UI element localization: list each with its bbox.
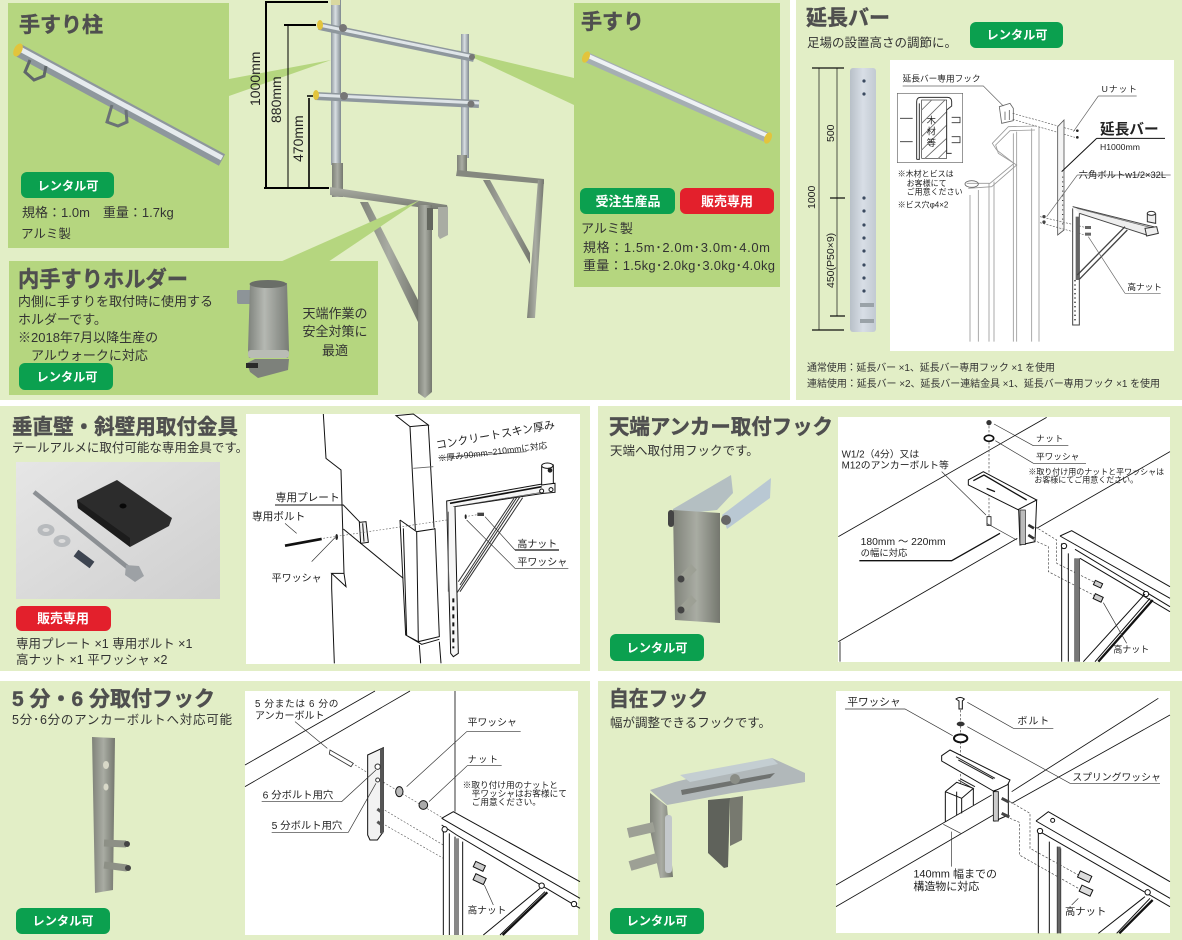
diagram labels: コンクリートスキン厚み (435, 418, 556, 452)
description text (18, 294, 213, 363)
posts (331, 0, 341, 165)
description text: 天端へ取付用フックです。 (610, 444, 759, 458)
diagram labels: 高ナット (1113, 643, 1149, 654)
leader lines (903, 86, 1171, 293)
dimension lines (812, 68, 845, 330)
parts list: 専用プレート ×1 専用ボルト ×1 (16, 637, 192, 651)
scaffold handrail photo (247, 0, 544, 398)
diagram: wall mounting (246, 414, 580, 664)
badge: rental: レンタル可 (37, 370, 97, 384)
description text: ホルダーです。 (18, 312, 107, 327)
diagram labels: 180mm ～ 220mm (861, 537, 946, 548)
panel: top anchor hook (598, 406, 1182, 671)
spec text: 規格：1.5m･2.0m･3.0m･4.0m (583, 240, 770, 255)
bracket (442, 812, 580, 935)
diagram labels: 平ワッシャ (1036, 451, 1079, 461)
usage notes: 通常使用：延長バー ×1、延長バー専用フック ×1 を使用 (807, 361, 1055, 374)
diagram labels: 六角ボルトw1/2×32L (1079, 169, 1166, 180)
usage notes: 連結使用：延長バー ×2、延長バー連結金具 ×1、延長バー専用フック ×1 を使用 (807, 377, 1160, 390)
diagram labels (842, 434, 1164, 654)
panel: 5-bu 6-bu hook (0, 681, 590, 940)
diagram labels: 専用ボルト (252, 511, 305, 523)
panel: handrail (574, 3, 780, 287)
dimension labels: 880mm (268, 76, 284, 123)
left bracket (330, 187, 448, 209)
diagram labels (252, 418, 567, 585)
diagram labels: 140mm 幅までの (913, 868, 997, 881)
badge: rental: レンタル可 (38, 179, 98, 193)
diagram labels: 平ワッシャ (272, 574, 322, 585)
description text: ※2018年7月以降生産の (18, 330, 158, 345)
diagram labels (847, 697, 1161, 918)
diagram labels: M12のアンカーボルト等 (842, 458, 949, 471)
badge: rental: レンタル可 (627, 641, 687, 655)
diagram labels: 高ナット (1127, 281, 1162, 292)
diagram: top anchor hook (838, 417, 1170, 662)
photo: top anchor hook (668, 475, 771, 623)
spec text: 規格：1.0m 重量：1.7kg (22, 205, 174, 220)
diagram labels: 平ワッシャ (468, 718, 517, 729)
badge: made to order: 受注生産品 (595, 194, 661, 209)
photo: holder cylinder (237, 280, 289, 378)
diagram labels: ※取り付け用のナットと平ワッシャは (1028, 466, 1164, 476)
heading: inner handrail holder: 内手すりホルダー (18, 267, 188, 292)
badge: sale only: 販売専用 (701, 194, 753, 209)
badge: rental: レンタル可 (627, 914, 687, 928)
diagram labels: ※ビス穴φ4×2 (898, 200, 949, 209)
callout wedge: handrail post (229, 60, 331, 96)
diagram labels: 5 分ボルト用穴 (272, 820, 342, 832)
diagram: adjustable hook (836, 691, 1170, 933)
leader lines (285, 452, 568, 568)
diagram labels: ご用意ください。 (472, 796, 541, 807)
dimension labels: 1000mm (247, 52, 263, 106)
diagram labels: 延長バー (1100, 121, 1159, 138)
heading: handrail: 手すり (581, 11, 644, 34)
diagram labels: ボルト (1017, 715, 1050, 727)
heading: top anchor hook: 天端アンカー取付フック (609, 416, 833, 439)
diagram labels: 延長バー専用フック (903, 73, 981, 84)
diagram labels: お客様にてご用意ください。 (1034, 474, 1138, 484)
diagram labels: ナット (1036, 434, 1064, 444)
diagram labels: 専用プレート (276, 492, 340, 504)
description text: 幅が調整できるフックです。 (610, 715, 771, 730)
panel: extension bar (796, 0, 1182, 400)
callout wedge: handrail (457, 50, 574, 105)
badge: rental (610, 908, 704, 934)
parts list (16, 637, 192, 667)
panel: inner handrail holder (9, 261, 378, 395)
badge: made to order (580, 188, 675, 214)
diagram labels (898, 73, 1166, 292)
dimension lines (264, 2, 329, 188)
diagram labels: 平ワッシャ (847, 697, 901, 709)
heading: handrail post: 手すり柱 (19, 14, 103, 37)
material text: アルミ製 (21, 227, 71, 241)
heading: wall mounting bracket: 垂直壁・斜壁用取付金具 (12, 416, 238, 439)
bracket (1060, 531, 1170, 662)
diagram labels: 平ワッシャはお客様にて (472, 788, 567, 799)
panel: wall mounting bracket (0, 406, 590, 671)
caption: safety: 安全対策に (302, 324, 368, 339)
leader lines (262, 722, 521, 905)
diagram: 5-bu 6-bu hook (245, 691, 580, 935)
photo: adjustable hook (628, 758, 805, 878)
diagram labels: ※取り付け用のナットと (463, 780, 558, 790)
dimension labels: 470mm (290, 115, 306, 162)
caption: safety: 最適 (322, 343, 348, 358)
caption: safety: 天端作業の (302, 306, 368, 321)
photo: handrail (580, 50, 774, 145)
badge: rental (19, 363, 113, 390)
diagram labels: 高ナット (468, 904, 506, 916)
diagram labels: ご用意ください (907, 187, 963, 197)
inset: wood mounting: 等 (927, 137, 936, 148)
spec text: アルミ製 (581, 221, 633, 236)
photo: 5-bu 6-bu hook (92, 737, 131, 893)
description text: 内側に手すりを取付時に使用する (18, 294, 213, 309)
badge: sale only: 販売専用 (37, 611, 89, 626)
bracket (1036, 812, 1170, 933)
photo: extension bar (850, 68, 876, 332)
heading: extension bar: 延長バー (806, 7, 890, 30)
diagram labels: アンカーボルト (255, 710, 324, 722)
inset: wood mounting (897, 93, 963, 163)
badge: rental (21, 172, 114, 198)
badge: rental (16, 908, 110, 934)
parts list: 高ナット ×1 平ワッシャ ×2 (16, 652, 167, 667)
upper and lower rails (319, 26, 474, 58)
diagram labels: 6 分ボルト用穴 (263, 789, 333, 801)
badge: sale only (680, 188, 774, 214)
badge: rental (610, 634, 704, 661)
leader lines (942, 424, 1127, 643)
diagram labels: Uナット (1102, 84, 1138, 94)
spec text: 重量：1.5kg･2.0kg･3.0kg･4.0kg (583, 258, 775, 273)
heading: 5-bu 6-bu hook: 5 分・6 分取付フック (12, 688, 215, 711)
diagram labels: ※厚み90mm~210mmに対応 (437, 439, 548, 464)
diagram labels: 平ワッシャ (517, 557, 567, 568)
spec text (581, 221, 775, 273)
inset: wood mounting: 材 (927, 126, 936, 137)
callout wedge: inner handrail holder (280, 200, 420, 262)
badge: rental (970, 22, 1063, 48)
leader lines (845, 702, 1160, 905)
main section background (0, 0, 790, 400)
panel: handrail post (8, 3, 229, 248)
diagram labels: スプリングワッシャ (1072, 771, 1161, 784)
right bracket (456, 170, 544, 184)
description text: テールアルメに取付可能な専用金具です。 (12, 440, 248, 455)
caption: safety (302, 306, 368, 358)
usage notes (807, 361, 1160, 390)
panel: adjustable hook (598, 681, 1182, 940)
diagram labels: 高ナット (1065, 905, 1106, 918)
badge: rental: レンタル可 (33, 914, 93, 928)
description text: アルウォークに対応 (31, 348, 148, 363)
diagram labels: 構造物に対応 (913, 879, 979, 893)
diagram labels: 高ナット (517, 537, 557, 550)
description text: 足場の設置高さの調節に。 (807, 35, 957, 50)
dimension labels: 450(P50×9) (825, 233, 837, 288)
dimension labels: 500 (825, 124, 837, 142)
dimension labels (806, 124, 837, 288)
diagram labels: ※木材とビスは (898, 169, 954, 179)
badge: rental: レンタル可 (987, 28, 1047, 42)
dimension labels: 1000 (806, 185, 818, 209)
diagram labels: ナット (468, 754, 500, 764)
diagram: extension bar assembly (890, 60, 1174, 351)
diagram labels (255, 699, 567, 916)
badge: sale only (16, 606, 111, 631)
heading: adjustable hook: 自在フック (609, 688, 708, 711)
dimension labels (247, 52, 306, 162)
diagram labels: W1/2（4分）又は (842, 449, 919, 461)
inset: wood mounting: 木 (927, 114, 937, 125)
diagram labels: 5 分または 6 分の (255, 699, 339, 710)
description text: 5分･6分のアンカーボルトへ対応可能 (12, 712, 232, 727)
photo: bracket parts (16, 462, 220, 599)
diagram labels: の幅に対応 (861, 547, 908, 558)
diagram labels: H1000mm (1100, 142, 1140, 152)
photo: handrail post (11, 42, 222, 160)
diagram labels: お客様にて (907, 178, 947, 188)
